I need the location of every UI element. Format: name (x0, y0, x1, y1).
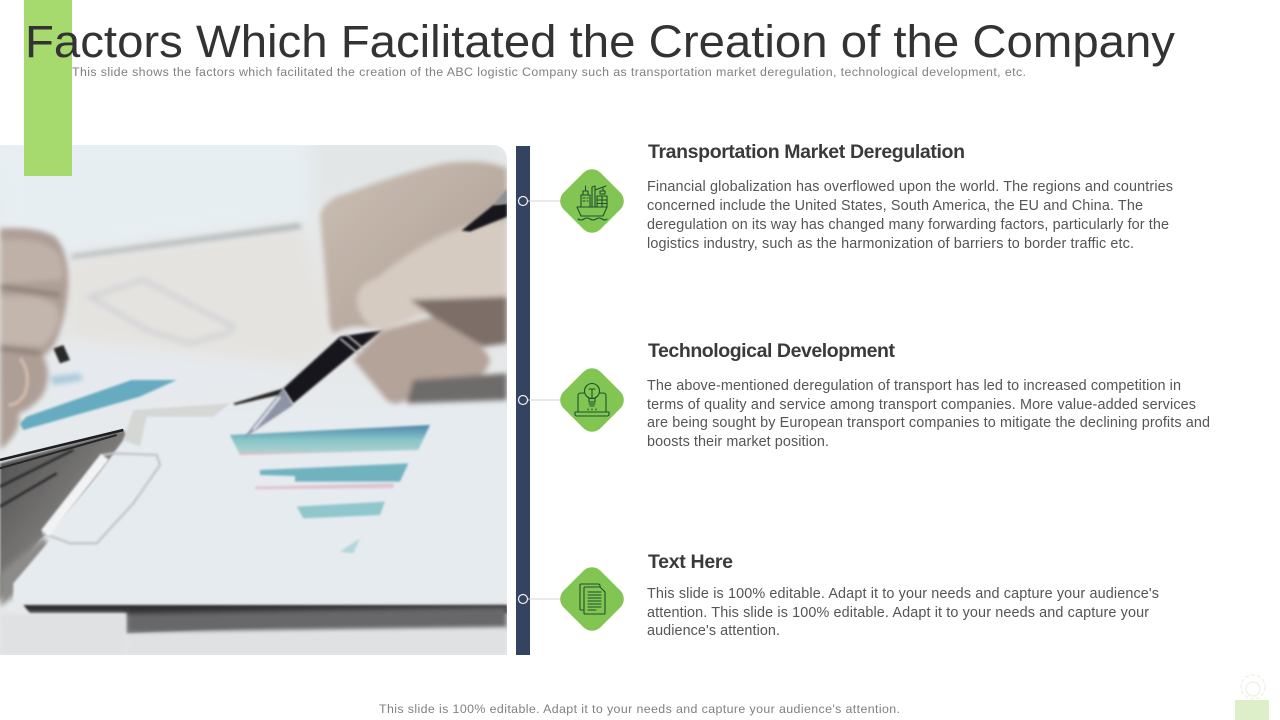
heading 3: Text Here (648, 551, 733, 573)
blurred clip on the rear sheet (90, 280, 233, 343)
text block 2: boosts their market position. (647, 434, 829, 450)
footer note: This slide is 100% editable. Adapt it to your needs and capture your audience's attention. (379, 702, 900, 716)
item 1: transportation market deregulation (518, 141, 1173, 252)
clipboard sheet (12, 436, 130, 600)
right hand (320, 162, 507, 403)
corner tab (1235, 700, 1269, 720)
connector 1 (518, 196, 562, 206)
item 3: text here (518, 551, 1159, 639)
icon: cargo ship in green diamond (555, 164, 629, 238)
icon: faint gear (1241, 675, 1265, 699)
text block 1 (647, 179, 1173, 252)
bottom shadow under clipboard and desk (23, 605, 507, 633)
text block 1: deregulation on its way has changed many forwarding factors, particularly for the (647, 217, 1169, 233)
pen lower barrel and tip (283, 330, 383, 403)
text block 2: terms of quality and service among transport companies. More value-added services (647, 397, 1196, 413)
heading 1: Transportation Market Deregulation (648, 141, 965, 163)
text block 1: logistics industry, such as the harmonization of barriers to border traffic etc. (647, 236, 1134, 252)
text block 3: attention. This slide is 100% editable. Adapt it to your needs and capture your (647, 605, 1149, 621)
ring (8, 358, 27, 405)
photo: hands pointing a pen at a chart on a clipboard (0, 140, 507, 655)
heading 2: Technological Development (648, 340, 896, 362)
green accent bar (24, 0, 72, 176)
text block 1: concerned include the United States, South America, the EU and China. The (647, 198, 1143, 214)
document clip (43, 453, 160, 543)
icon: stacked documents in green diamond (555, 562, 629, 636)
chart bars on the clipboard (230, 425, 430, 553)
text block 2 (647, 378, 1210, 450)
connector 2 (518, 396, 562, 404)
pen upper barrel (462, 203, 507, 232)
text block 3: This slide is 100% editable. Adapt it to your needs and capture your audience's (647, 586, 1159, 602)
rear chart bar (20, 380, 177, 430)
text block 3 (647, 586, 1159, 639)
icon: laptop with light bulb in green diamond (555, 363, 629, 437)
text block 3: audience's attention. (647, 623, 780, 639)
item 2: technological development (518, 340, 1210, 450)
dark laptop at lower left (0, 430, 130, 600)
connector 3 (518, 594, 562, 604)
photo background: blurred white paper top-left (49, 145, 500, 354)
text block 2: are being sought by European transport companies to mitigate the declining profits and (647, 415, 1210, 431)
subtitle: This slide shows the factors which facilitated the creation of the ABC logistic Company such as transportation market deregulation, technological development, etc. (72, 65, 1026, 79)
title: Factors Which Facilitated the Creation of the Company (25, 16, 1176, 67)
text block 1: Financial globalization has overflowed upon the world. The regions and countries (647, 179, 1173, 195)
timeline: vertical bar (516, 146, 530, 655)
left hand (0, 228, 68, 450)
text block 2: The above-mentioned deregulation of transport has led to increased competition in (647, 378, 1181, 394)
